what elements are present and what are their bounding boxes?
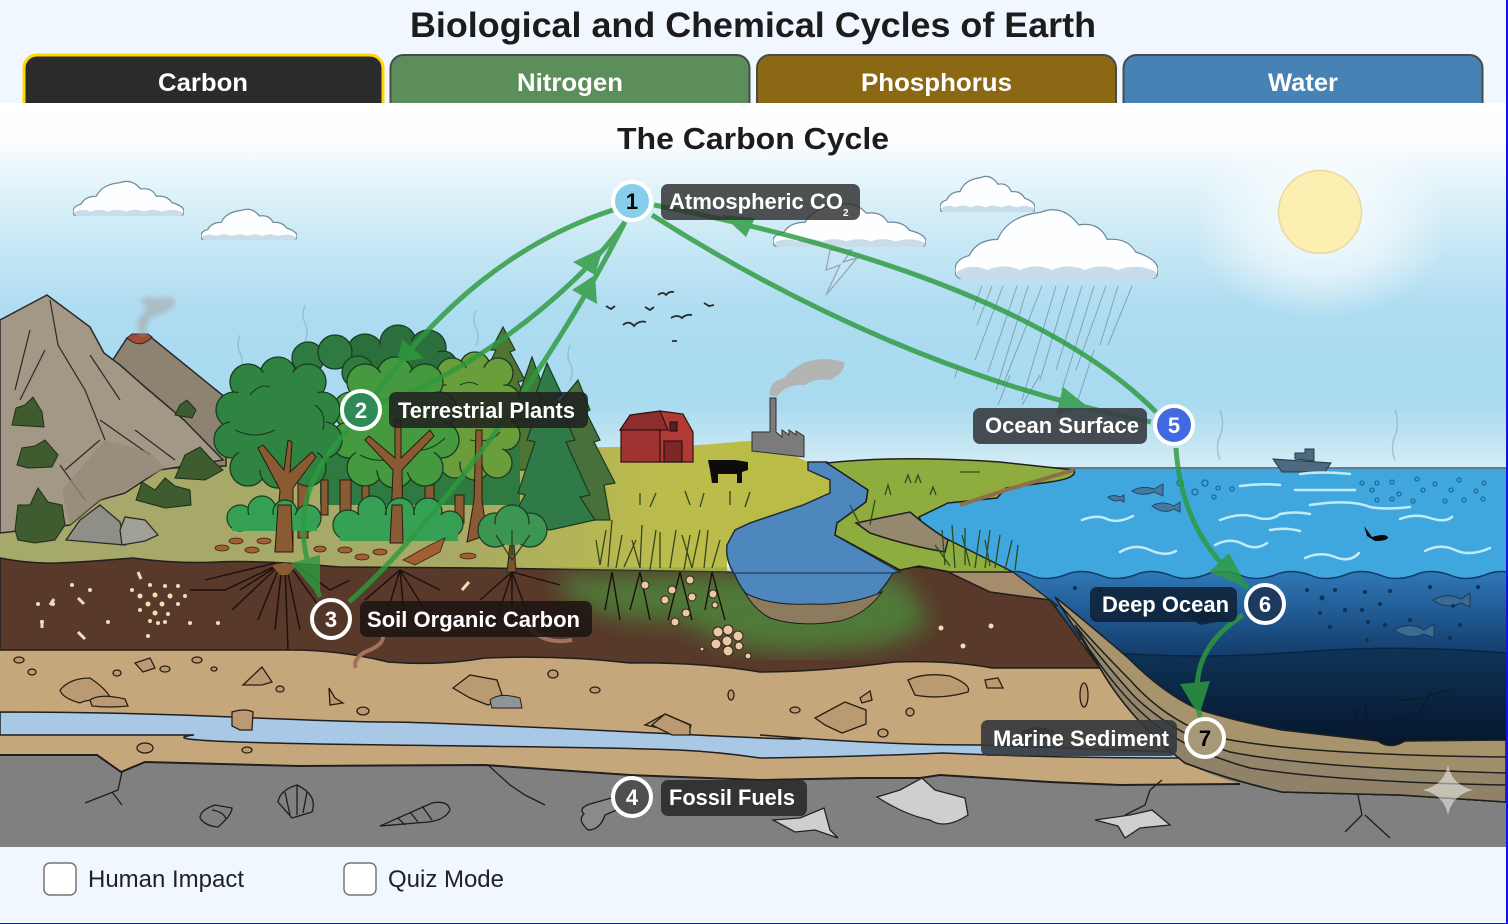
surface fish: [1108, 484, 1180, 512]
right tree trunk: [467, 430, 487, 542]
sand rocks: [14, 657, 1088, 753]
checkbox: human impact: Human Impact: [88, 866, 244, 893]
under-canopy band: [320, 445, 520, 505]
root crown: [272, 563, 296, 575]
arrow: ocean surface to atmosphere: [654, 205, 1156, 412]
barn: [620, 411, 693, 462]
sand gray rock: [490, 695, 522, 708]
arrow: soil to atmosphere: [349, 222, 625, 602]
tab: Water: [1124, 55, 1482, 125]
clouds: [73, 176, 1158, 279]
shoreline grass: [850, 472, 1018, 570]
rock layer: [0, 745, 1506, 847]
aquifer boulders: [232, 710, 690, 735]
panel heading: The Carbon Cycle: [617, 121, 889, 156]
node 1: atmospheric CO2: [613, 182, 860, 220]
heat wisps: [238, 305, 1398, 460]
front pine: [510, 363, 595, 530]
node 5: ocean surface: [973, 406, 1193, 444]
dark top canopy: [347, 325, 457, 379]
coastal slope: [945, 571, 1058, 606]
node 3: soil organic carbon: Soil Organic Carbon: [367, 607, 580, 632]
factory with smoke: [752, 359, 844, 457]
dark rocks under labels: [1020, 727, 1055, 740]
groundwater aquifer: [0, 712, 1185, 758]
node 6: deep ocean: Deep Ocean: [1102, 592, 1229, 617]
rock cracks: [85, 765, 1390, 838]
arrow: plants to soil: [291, 428, 350, 597]
soil layer: [0, 558, 1100, 672]
cycle arrows: [291, 205, 1248, 717]
lightning: [826, 250, 857, 295]
small tree: [478, 505, 547, 572]
arrow: atmosphere to ocean surface: [652, 215, 1151, 422]
checkbox: quiz mode: Quiz Mode: [388, 866, 504, 893]
ship: [1273, 449, 1331, 472]
forest: [214, 325, 615, 572]
back pines: [470, 327, 615, 520]
roots: [190, 563, 725, 650]
right crown: [430, 352, 520, 480]
fossil shells: [200, 785, 645, 830]
node 1: atmospheric CO2: 1: [626, 189, 638, 214]
node 1: atmospheric CO2: 2: [843, 208, 849, 219]
green humus glow: [560, 575, 930, 652]
floor shrubs: [227, 496, 463, 540]
field grass and shrubs: [596, 491, 750, 570]
birds: [606, 292, 714, 341]
cow: [708, 460, 748, 483]
node 4: fossil fuels: 4: [626, 785, 639, 810]
soil seeds: [36, 583, 994, 648]
ocean water base: [900, 467, 1506, 580]
node 5: ocean surface: 5: [1168, 413, 1180, 438]
deep fish: [1394, 593, 1470, 638]
node 6: deep ocean: 6: [1259, 592, 1271, 617]
fallen leaves: [215, 538, 476, 565]
tab: Nitrogen: [390, 55, 750, 125]
back left canopy: [292, 335, 374, 388]
sun: [1190, 130, 1450, 320]
deep ocean: [1000, 572, 1508, 660]
mountain: [0, 295, 223, 533]
peninsula: [827, 459, 1074, 572]
node 1: atmospheric CO2: Atmospheric CO: [669, 189, 843, 214]
title: Biological and Chemical Cycles of Earth: [410, 6, 1096, 45]
worms: [355, 628, 572, 668]
arrow: ocean surface to deep ocean: [1176, 448, 1248, 588]
tab: Nitrogen: Nitrogen: [517, 69, 623, 97]
rain: [955, 286, 1132, 405]
node 7: marine sediment: 7: [1199, 726, 1211, 751]
checkbox: human impact: [44, 863, 244, 895]
node 5: ocean surface: Ocean Surface: [985, 413, 1139, 438]
volcano: [105, 297, 226, 470]
tab: Carbon: [24, 55, 383, 125]
node 2: terrestrial plants: [342, 391, 588, 429]
diver silhouette: [1364, 526, 1388, 541]
sky: [0, 103, 1506, 478]
arrow: plants to atmosphere: [380, 222, 625, 402]
node 4: fossil fuels: Fossil Fuels: [669, 785, 795, 810]
tab: Phosphorus: Phosphorus: [861, 69, 1012, 97]
abyss: [1060, 648, 1506, 750]
squid and coral silhouette: [1350, 690, 1450, 740]
ground: hills: [0, 440, 830, 600]
node 4: fossil fuels: [613, 778, 807, 816]
ocean waves: [1082, 472, 1490, 559]
node 3: soil organic carbon: 3: [325, 607, 337, 632]
tab: Water: Water: [1268, 69, 1338, 97]
middle crown: [331, 357, 459, 488]
node 2: terrestrial plants: 2: [355, 398, 367, 423]
middle tree trunk: [365, 420, 434, 543]
node 6: deep ocean: [1090, 585, 1284, 623]
big left crown: [214, 357, 342, 488]
soil nodules: [641, 576, 751, 659]
crown detail lines: [235, 382, 500, 460]
watermark sparkle: [1423, 765, 1473, 815]
plankton dots: [1177, 477, 1486, 503]
sediment bands: [1055, 597, 1506, 802]
arrow: atmosphere to plants: [365, 210, 613, 410]
mountain shrubs: [12, 397, 223, 543]
left tree trunk: [258, 440, 316, 552]
back trunks: [298, 480, 464, 538]
node 7: marine sediment: Marine Sediment: [993, 726, 1170, 751]
checkbox: quiz mode: [344, 863, 504, 895]
cycle tabs: [24, 55, 1482, 125]
tab: Phosphorus: [757, 55, 1116, 125]
node 2: terrestrial plants: Terrestrial Plants: [398, 398, 575, 423]
node 3: soil organic carbon: [312, 600, 592, 638]
tab: Carbon: Carbon: [158, 69, 248, 97]
arrow: deep ocean to marine sediment: [1180, 615, 1243, 717]
coal and mineral deposits: [773, 778, 1170, 838]
foreground boulders: [66, 505, 158, 545]
sand layer upper and lower: [0, 640, 1240, 785]
deep plankton: [1073, 585, 1480, 642]
river and lake: [727, 462, 900, 624]
node 7: marine sediment: [981, 719, 1224, 757]
